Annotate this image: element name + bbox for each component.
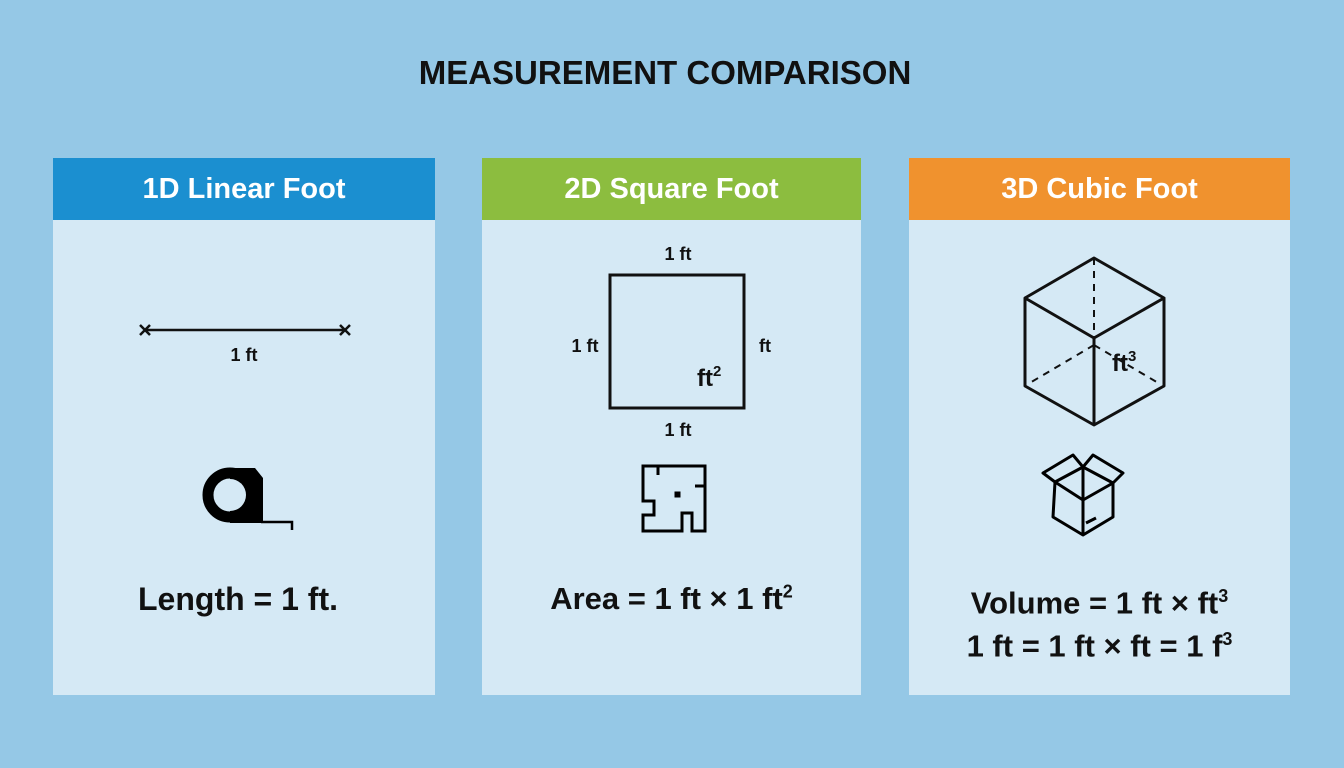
panel: 2D square foot — [482, 158, 861, 695]
formula: volume: Volume = 1 ft × ft3 — [971, 585, 1228, 620]
header: 1D: 1D Linear Foot — [142, 173, 346, 205]
diagram: square: ft — [759, 336, 771, 356]
icon: floor plan — [643, 466, 705, 531]
icon: box — [1043, 455, 1123, 535]
panel: 1D linear foot — [53, 158, 435, 695]
diagram: line: 1 ft — [230, 345, 258, 365]
header: 1D — [53, 158, 435, 220]
diagram: square: 1 ft — [664, 244, 692, 264]
formula: volume: 1 ft = 1 ft × ft = 1 f3 — [967, 629, 1232, 664]
diagram: cube: ft — [1112, 350, 1128, 377]
title: MEASUREMENT COMPARISON — [419, 54, 911, 91]
diagram: square: 1 ft — [664, 420, 692, 440]
header: 2D: 2D Square Foot — [564, 173, 779, 205]
formula: length: Length = 1 ft. — [138, 581, 338, 617]
diagram: square: 2 — [713, 363, 721, 380]
header: 2D — [482, 158, 861, 220]
formula: volume — [967, 585, 1232, 664]
diagram: line — [139, 324, 351, 530]
diagram: square: 1 ft — [572, 336, 599, 356]
diagram: square: ft — [697, 365, 713, 392]
formula: area: Area = 1 ft × 1 ft2 — [550, 581, 793, 616]
diagram: cube: 3 — [1128, 348, 1136, 365]
diagram: cube — [1023, 256, 1166, 536]
diagram: square — [572, 244, 771, 532]
header: 3D: 3D Cubic Foot — [1001, 173, 1198, 205]
icon: tape measure — [208, 468, 292, 530]
header: 3D — [909, 158, 1290, 220]
panel: 3D cubic foot — [909, 158, 1290, 695]
